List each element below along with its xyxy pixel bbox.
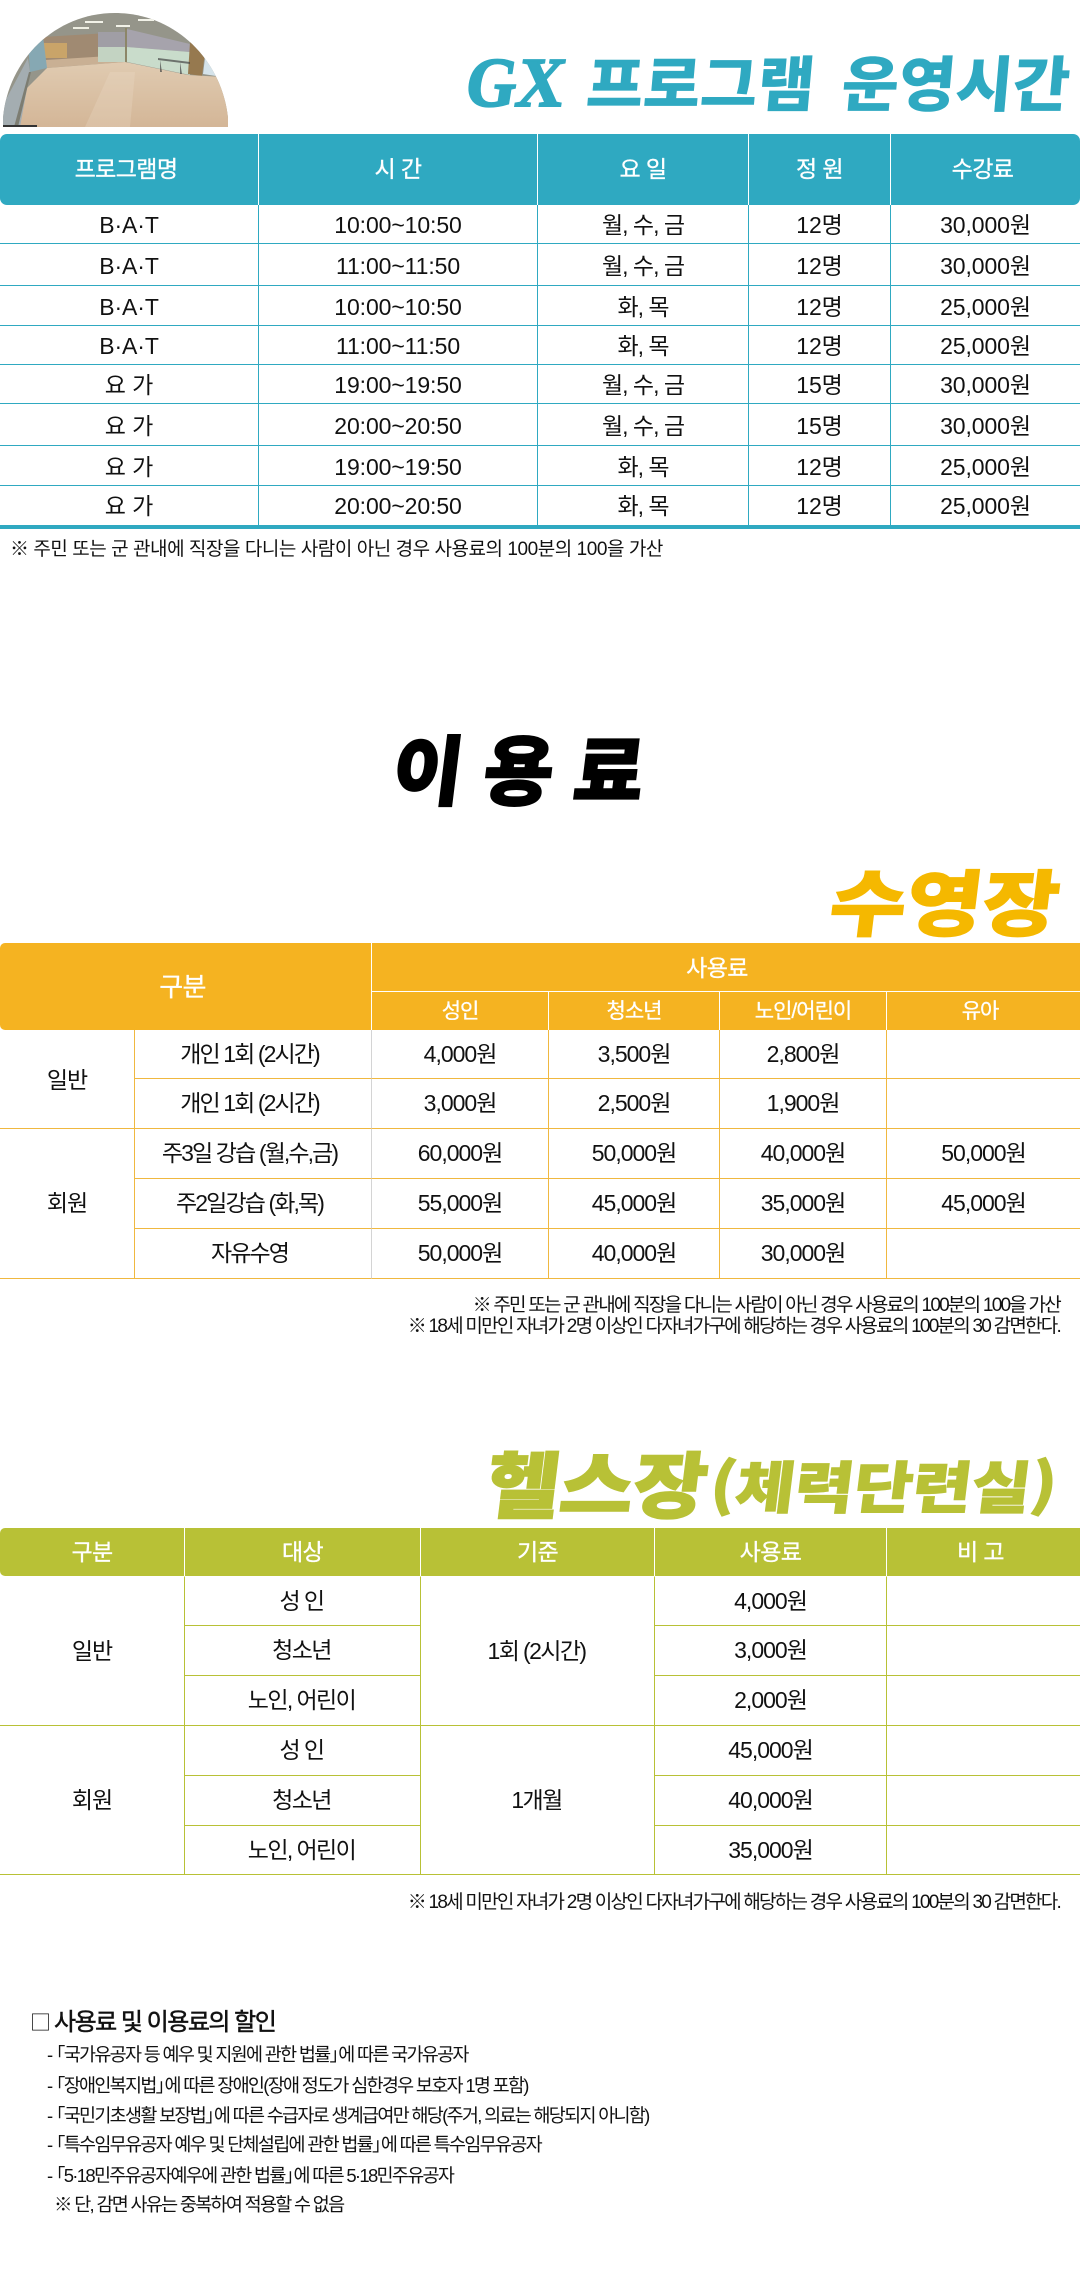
row: 회원 청소년: [184, 1776, 1080, 1826]
row: 일반 성인: 4,000원: [734, 1588, 807, 1614]
header row: age groups: 유아: [962, 1000, 998, 1022]
row 5: 월, 수, 금: [602, 372, 684, 398]
table header: 사용료: [740, 1538, 801, 1564]
table header: 일반: [72, 1638, 112, 1664]
discount footnote: ※ 단, 감면 사유는 중복하여 적용할 수 없음: [54, 2194, 343, 2215]
row: 회원 노인 어린이: [184, 1826, 1080, 1875]
table header: 1개월: [511, 1786, 562, 1812]
row 4: 25,000원: [940, 333, 1031, 359]
note: swimming discount: ※ 18세 미만인 자녀가 2명 이상인 다자녀가구에 해당하는 경우 사용료의 100분의 30 감면한다.: [408, 1316, 1060, 1337]
row 7: 19:00~19:50: [334, 454, 462, 480]
row 6: 20:00~20:50: [334, 412, 462, 438]
discount heading: □사용료 및 이용료의 할인: [30, 2007, 275, 2037]
header row: age groups: 성인: [442, 1000, 478, 1022]
table header: 1회 (2시간): [488, 1638, 585, 1664]
row 7: [0, 446, 1080, 486]
row 8: 화, 목: [617, 493, 669, 519]
row 7: 25,000원: [940, 454, 1031, 480]
photo: GX studio room in dome crop: [3, 13, 228, 127]
row 6: 30,000원: [940, 412, 1031, 438]
row 3: 화, 목: [617, 294, 669, 320]
table header: 기준: [517, 1538, 558, 1564]
row 6: 월, 수, 금: [602, 412, 684, 438]
row: 일반 청소년: 3,000원: [734, 1637, 807, 1663]
row 3: [0, 286, 1080, 326]
row 7: 12명: [796, 454, 843, 480]
row: 회원 성인: 45,000원: [728, 1737, 813, 1763]
row: 회원 성인: 성 인: [280, 1737, 323, 1763]
row: 일반 노인 어린이: 2,000원: [734, 1687, 807, 1713]
row: 회원 청소년: 청소년: [272, 1787, 331, 1813]
row 8: [0, 486, 1080, 529]
header row: 구분 and 사용료: [0, 943, 1080, 1279]
header row: 구분 and 사용료: 사용료: [686, 955, 748, 981]
header row: age groups: 청소년: [607, 1000, 662, 1022]
table: fitness room fees: [0, 1528, 1080, 1875]
heading: 헬스장(체력단련실): 헬스장: [481, 1428, 714, 1533]
row 5: 30,000원: [940, 372, 1031, 398]
table: swimming pool fees: [0, 943, 1080, 1279]
row 7: 화, 목: [617, 454, 669, 480]
row: 회원 주3일: 50,000원: [941, 1140, 1026, 1166]
row 6: [0, 404, 1080, 446]
header row: 구분 and 사용료: 일반: [47, 1067, 87, 1093]
row: 일반 성인: [0, 1576, 1080, 1726]
row: 회원 주3일: 주3일 강습 (월,수,금): [162, 1140, 337, 1166]
table header: 요 일: [620, 156, 666, 182]
row 7: 요 가: [105, 454, 153, 480]
row: 일반 1: 개인 1회 (2시간): [180, 1040, 319, 1066]
row: 회원 주2일: [134, 1179, 1080, 1229]
row 4: 12명: [796, 333, 843, 359]
row: 일반 1: 4,000원: [424, 1040, 496, 1066]
table header: 시 간: [375, 156, 421, 182]
row 6: 요 가: [105, 412, 153, 438]
table header: 구분: [71, 1538, 113, 1564]
row: 회원 주3일: 60,000원: [418, 1140, 502, 1166]
row: 회원 노인 어린이: 35,000원: [728, 1836, 813, 1862]
row: 회원 주2일: 55,000원: [418, 1190, 502, 1216]
row: 회원 주2일: 주2일강습 (화,목): [176, 1190, 323, 1216]
header row: 구분 and 사용료: 회원: [47, 1190, 87, 1216]
row 4: 11:00~11:50: [336, 333, 460, 359]
row 2: 12명: [796, 252, 843, 278]
row 3: 12명: [796, 294, 843, 320]
row: 회원 노인 어린이: 노인, 어린이: [248, 1836, 355, 1862]
row: 일반 2: 1,900원: [767, 1090, 839, 1116]
row 8: 요 가: [105, 493, 153, 519]
row 8: 12명: [796, 493, 843, 519]
row 5: [0, 365, 1080, 404]
row 1: B·A·T: [99, 212, 159, 238]
row: 일반 1: 2,800원: [767, 1040, 839, 1066]
table header: 대상: [282, 1538, 323, 1564]
discount line 3: - 「국민기초생활 보장법」에 따른 수급자로 생계급여만 해당(주거, 의료는 해당되지 아니함): [47, 2105, 649, 2126]
row: 회원 성인: [0, 1726, 1080, 1875]
row: 회원 자유수영: 50,000원: [418, 1240, 502, 1266]
row: 일반 청소년: 청소년: [272, 1637, 331, 1663]
row: 회원 주2일: 45,000원: [592, 1190, 676, 1216]
table header: 정 원: [796, 156, 843, 182]
row 2: 30,000원: [940, 252, 1031, 278]
row 5: 19:00~19:50: [334, 372, 462, 398]
row: 일반 1: [0, 1030, 1080, 1129]
row: 회원 주2일: 45,000원: [941, 1190, 1026, 1216]
row 2: B·A·T: [99, 252, 159, 278]
header row: age groups: [372, 992, 1080, 1030]
row: 회원 자유수영: 30,000원: [761, 1240, 845, 1266]
note: fitness discount: ※ 18세 미만인 자녀가 2명 이상인 다자녀가구에 해당하는 경우 사용료의 100분의 30 감면한다.: [408, 1892, 1060, 1913]
row: 일반 1: 3,500원: [598, 1040, 670, 1066]
row 6: 15명: [796, 412, 843, 438]
heading: 헬스장(체력단련실): [481, 1428, 1062, 1533]
table header: 비 고: [957, 1538, 1004, 1564]
discount line 2: - 「장애인복지법」에 따른 장애인(장애 정도가 심한경우 보호자 1명 포함): [47, 2075, 528, 2096]
heading: 수영장: 수영장: [824, 846, 1066, 951]
title: GX 프로그램 운영시간: GX: [460, 44, 571, 122]
row 3: 25,000원: [940, 294, 1031, 320]
row: 일반 노인 어린이: 노인, 어린이: [248, 1687, 355, 1713]
table: GX program schedule: [0, 134, 1080, 529]
heading: 헬스장(체력단련실): (체력단련실): [706, 1444, 1062, 1525]
row 3: B·A·T: [99, 294, 159, 320]
row 4: [0, 326, 1080, 365]
discount section: [30, 2007, 650, 2215]
table header: [0, 1528, 1080, 1875]
row: 일반 노인 어린이: [184, 1676, 1080, 1726]
row: 회원 주2일: 35,000원: [761, 1190, 845, 1216]
row 5: 요 가: [105, 372, 153, 398]
row: 회원 자유수영: 자유수영: [211, 1240, 288, 1266]
row 1: 30,000원: [940, 212, 1031, 238]
row: 회원 주3일: 40,000원: [761, 1140, 845, 1166]
row 8: 20:00~20:50: [334, 493, 462, 519]
header row: 구분 and 사용료: 구분: [159, 972, 206, 1002]
discount line 4: - 「특수임무유공자 예우 및 단체설립에 관한 법률」에 따른 특수임무유공자: [47, 2134, 541, 2155]
row: 일반 2: 3,000원: [424, 1090, 496, 1116]
title: GX 프로그램 운영시간: 프로그램: [583, 37, 819, 124]
row 2: [0, 244, 1080, 286]
row: 회원 주3일: [0, 1129, 1080, 1279]
row 1: 월, 수, 금: [602, 212, 684, 238]
row: 회원 자유수영: [134, 1229, 1080, 1279]
row: 일반 2: [134, 1079, 1080, 1129]
row: 회원 주3일: 50,000원: [592, 1140, 676, 1166]
row 4: B·A·T: [99, 333, 159, 359]
table header: 회원: [72, 1786, 112, 1812]
table header: [0, 134, 1080, 529]
table header: 수강료: [952, 156, 1013, 182]
row: 일반 2: 개인 1회 (2시간): [180, 1090, 319, 1116]
row 1: 10:00~10:50: [334, 212, 462, 238]
row 1: [0, 205, 1080, 244]
heading: 이용료: 이 용 료: [387, 711, 652, 821]
row: 일반 2: 2,500원: [598, 1090, 670, 1116]
row 8: 25,000원: [940, 493, 1031, 519]
note: GX surcharge: ※ 주민 또는 군 관내에 직장을 다니는 사람이 아닌 경우 사용료의 100분의 100을 가산: [10, 539, 663, 560]
row 2: 11:00~11:50: [336, 252, 460, 278]
title: GX 프로그램 운영시간: 운영시간: [838, 37, 1074, 124]
row: 일반 성인: 성 인: [280, 1588, 323, 1614]
row: 회원 자유수영: 40,000원: [592, 1240, 676, 1266]
row: 회원 청소년: 40,000원: [728, 1787, 813, 1813]
note: swimming surcharge: ※ 주민 또는 군 관내에 직장을 다니는 사람이 아닌 경우 사용료의 100분의 100을 가산: [473, 1295, 1060, 1316]
title: GX 프로그램 운영시간: [460, 37, 1074, 124]
row 3: 10:00~10:50: [334, 294, 462, 320]
row: 일반 청소년: [184, 1626, 1080, 1676]
row 5: 15명: [796, 372, 843, 398]
header row: age groups: 노인/어린이: [755, 1000, 851, 1022]
row 4: 화, 목: [617, 333, 669, 359]
discount line 5: - 「5·18민주유공자예우에 관한 법률」에 따른 5·18민주유공자: [47, 2165, 453, 2186]
discount line 1: - 「국가유공자 등 예우 및 지원에 관한 법률」에 따른 국가유공자: [47, 2044, 468, 2065]
table header: 프로그램명: [75, 156, 177, 182]
row 2: 월, 수, 금: [602, 252, 684, 278]
row 1: 12명: [796, 212, 843, 238]
